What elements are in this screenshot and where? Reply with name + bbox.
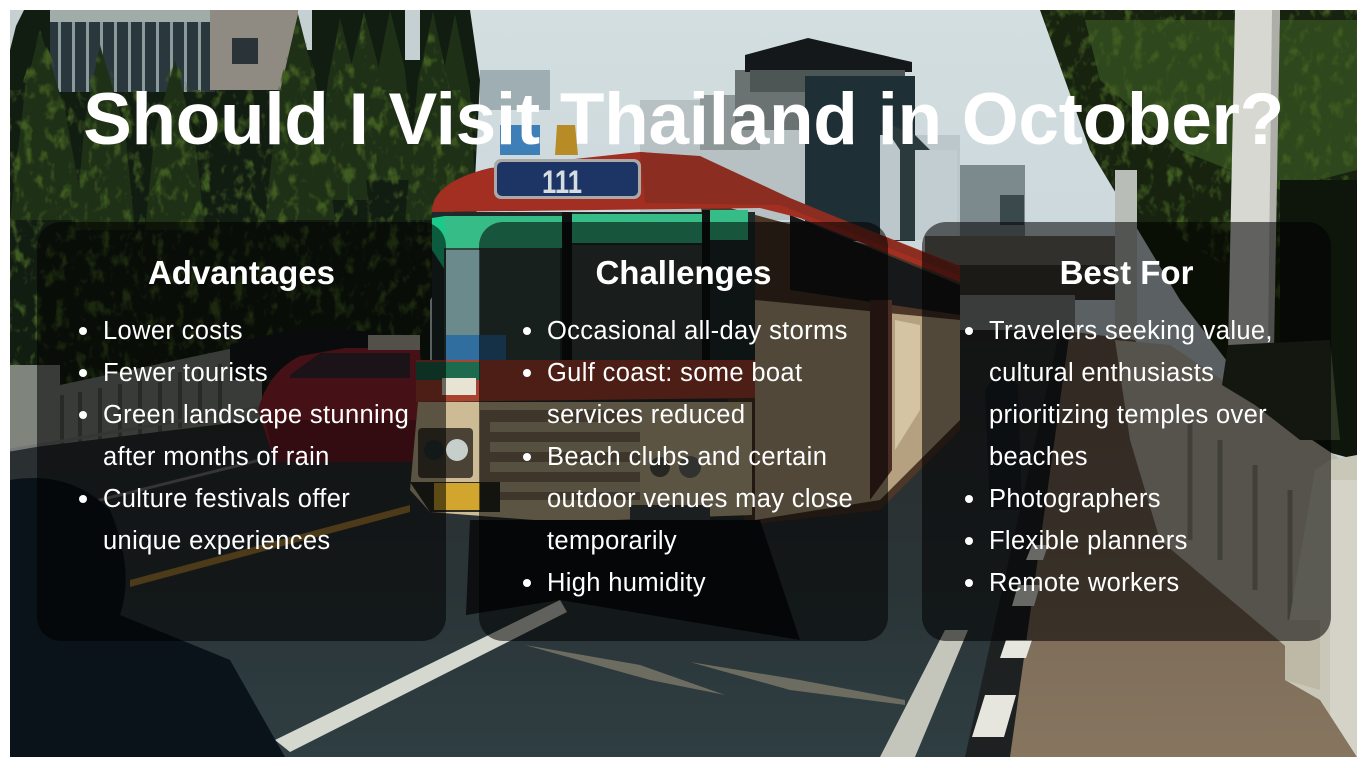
list: challenges: High humidity [547,569,706,597]
list: challenges: outdoor venues may close [547,485,853,513]
panel: best for [922,222,1331,641]
list: challenges: temporarily [547,527,677,555]
heading: advantages: Advantages [148,254,335,291]
list: best for: Remote workers [989,569,1180,597]
road [10,330,1070,757]
bus roof [432,152,960,282]
foreground silhouette [10,478,285,757]
list: challenges: Occasional all-day storms [547,317,848,345]
list: challenges [523,317,853,597]
list: best for: beaches [989,443,1088,471]
list: challenges: Gulf coast: some boat [547,359,802,387]
right tree [1040,10,1357,460]
list: best for: Flexible planners [989,527,1188,555]
title: Should I Visit Thailand in October? [83,79,1284,160]
bus sign: 111 [542,164,582,200]
panel: challenges [479,222,888,641]
distant buildings [960,165,1025,245]
list: advantages: Lower costs [103,317,243,345]
lane line right [880,630,968,757]
list: advantages [79,317,409,555]
bus windshield [432,212,755,365]
list: advantages: Fewer tourists [103,359,268,387]
heading: challenges: Challenges [595,254,772,291]
list: advantages: unique experiences [103,527,330,555]
panel: advantages [37,222,446,641]
railing [1115,340,1357,700]
list: best for: Photographers [989,485,1161,513]
motorcycle [985,376,1022,510]
list: best for: cultural enthusiasts [989,359,1214,387]
roof light [555,125,578,155]
list: best for: prioritizing temples over [989,401,1267,429]
bus sign [494,159,641,200]
heading: best for: Best For [1060,254,1193,291]
list: advantages: Culture festivals offer [103,485,350,513]
list: advantages: after months of rain [103,443,330,471]
road markings [275,600,567,752]
left tree mass and building [10,10,480,470]
list: challenges: Beach clubs and certain [547,443,827,471]
list: best for [965,317,1273,597]
utility pole [1228,10,1280,350]
list: best for: Travelers seeking value, [989,317,1273,345]
overpass and far traffic [925,236,1130,265]
list: advantages: Green landscape stunning [103,401,409,429]
bus front [416,360,755,402]
list: challenges: services reduced [547,401,745,429]
bus side [700,200,960,525]
curb dashes [965,330,1070,757]
sidewalk [1005,330,1357,757]
cars [230,329,370,380]
